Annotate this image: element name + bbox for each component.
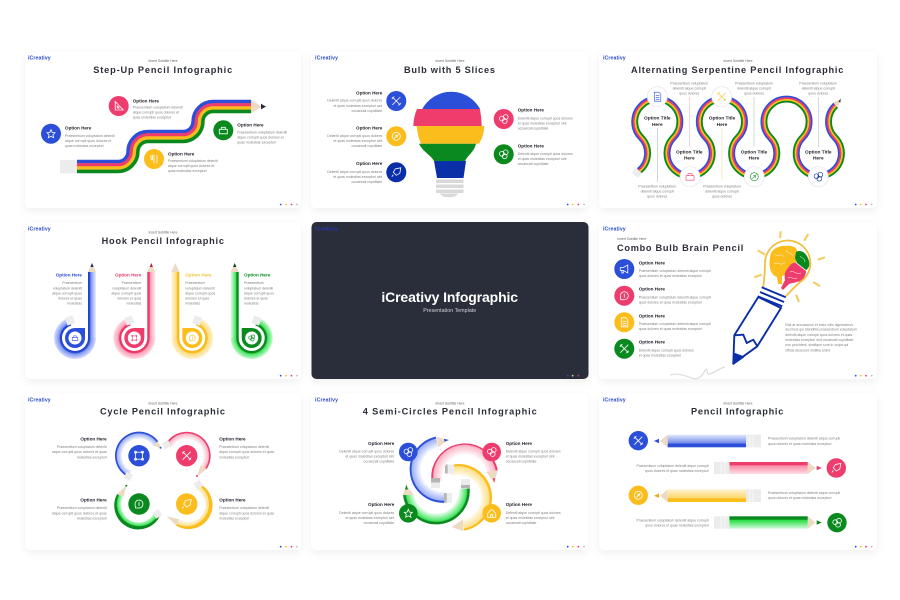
option: pink: Option Here <box>518 108 544 113</box>
semi-circle pencil: green <box>402 479 470 519</box>
option text: top right: molestias excepturi <box>219 456 249 460</box>
logo: iCreativy <box>28 397 51 403</box>
option: blue: et quas molestias excepturi sint <box>333 104 382 108</box>
option: yellow: et quas molestias excepturi sint <box>506 516 555 520</box>
option titles: Here <box>717 122 728 128</box>
hook text: pink: Option Here <box>115 272 142 277</box>
paragraph: ducimus qui blanditiis praesentium voluptatum <box>785 328 857 332</box>
captions: deleniti atque corrupti <box>673 86 706 90</box>
option: blue: occaecati cupiditate <box>364 460 394 464</box>
pagination dots <box>855 204 873 205</box>
row: blue pencil <box>629 431 840 450</box>
option: pink <box>482 441 561 464</box>
option: navy: Option Here <box>356 161 383 166</box>
option: blue <box>339 441 418 464</box>
paragraph: non provident, similique sunt in culpa qui <box>785 343 849 347</box>
hook text: blue: Option Here <box>56 272 82 277</box>
option: yellow: quos dolores et quas molestias excepturi <box>639 327 702 331</box>
option: green <box>213 120 287 144</box>
row: yellow pencil: Praesentium voluptatum deleniti atque corrupti <box>768 491 840 495</box>
cycle pencil: green <box>117 485 162 526</box>
option: blue: atque corrupti quos dolores et <box>65 139 111 143</box>
option titles: Option Title <box>644 115 671 121</box>
option: blue: quas molestias excepturi <box>65 144 104 148</box>
option: blue <box>614 259 711 279</box>
pagination dots <box>567 546 585 548</box>
option: navy <box>327 161 406 184</box>
scribble line <box>670 367 725 379</box>
option: yellow: Option Here <box>356 125 383 130</box>
pagination dots <box>567 375 579 377</box>
option: navy: Deleniti atque corrupti quos dolores <box>327 170 383 174</box>
option text: bottom right: Praesentium voluptatum deleniti <box>219 506 269 510</box>
captions: quos dolores <box>679 92 700 96</box>
hook text: yellow: Option Here <box>185 272 212 277</box>
hook text: yellow: dolores et quas <box>185 296 209 300</box>
option text: top right: Praesentium voluptatum deleniti <box>219 445 269 449</box>
brain lobes <box>769 246 809 290</box>
hook text: yellow: Praesentium <box>185 281 205 285</box>
semi-circle pencil: blue <box>415 436 452 503</box>
hook text: yellow: atque corrupti quos <box>185 292 216 296</box>
hook text: blue: Praesentium <box>62 281 82 285</box>
pagination dots <box>280 204 298 205</box>
title: iCreativy Infographic <box>381 289 518 305</box>
option text: top right: Option Here <box>219 436 246 441</box>
option: pink: occaecati cupiditate <box>506 460 536 464</box>
option: green: Option Here <box>518 143 544 148</box>
option: blue <box>327 90 406 113</box>
captions: quos dolores <box>744 92 764 96</box>
logo: iCreativy <box>603 226 626 232</box>
panel: combo bulb brain pencil <box>599 222 877 379</box>
option: blue: occaecati cupiditate <box>352 109 382 113</box>
option text: top left <box>52 436 107 460</box>
paragraph: molestias excepturi sint occaecati cupiditate <box>785 338 853 342</box>
option text: bottom left: molestias excepturi <box>77 516 107 520</box>
hook text: pink: dolores et quas <box>117 296 142 300</box>
semi-circle pencil: yellow <box>445 464 487 531</box>
hook text: pink: atque corrupti quos <box>111 292 142 296</box>
subtitle: Insert Subtitle Here <box>435 402 465 406</box>
option: green: Deleniti atque corrupti quos dolores <box>639 349 694 353</box>
logo: iCreativy <box>603 55 626 61</box>
hook text: green: voluptatum deleniti <box>244 286 273 290</box>
hook text: blue: atque corrupti quos <box>52 292 82 296</box>
captions: quos dolores <box>647 194 668 198</box>
option: yellow: Option Here <box>506 502 532 507</box>
option: green: atque corrupti quos dolores et <box>237 136 284 140</box>
option: navy: et quas molestias excepturi sint <box>333 175 382 179</box>
captions: deleniti atque corrupti <box>802 86 835 90</box>
paragraph <box>785 323 857 352</box>
option text: bottom left: Praesentium voluptatum deleniti <box>57 506 107 510</box>
option titles: Option Title <box>676 149 703 155</box>
option: pink <box>614 286 711 306</box>
option: yellow <box>482 502 561 525</box>
captions: deleniti atque corrupti <box>705 190 739 194</box>
captions: deleniti atque corrupti <box>737 86 771 90</box>
option: pink <box>109 96 183 120</box>
subtitle: Insert Subtitle Here <box>148 231 178 235</box>
subtitle: Insert Subtitle Here <box>148 59 178 63</box>
option titles: Here <box>813 155 824 161</box>
hook pencil: blue <box>58 263 96 355</box>
hook text: green: atque corrupti quos <box>244 292 274 296</box>
bulb slices <box>413 92 484 197</box>
option text: bottom left: atque corrupti quos dolores et quas <box>52 512 107 516</box>
option: green: et quas molestias excepturi sint <box>518 157 567 161</box>
option: navy: occaecati cupiditate <box>352 180 382 184</box>
title: Bulb with 5 Slices <box>404 65 495 75</box>
row: green pencil <box>637 513 847 532</box>
option: pink: Option Here <box>639 287 665 292</box>
subtitle: Insert Subtitle Here <box>148 402 178 406</box>
option text: bottom left: Option Here <box>80 497 107 502</box>
cycle pencil: yellow <box>167 480 209 526</box>
option: green: occaecati cupiditate <box>364 521 394 525</box>
option: pink: Deleniti atque corrupti quos dolores <box>506 450 561 454</box>
hook text: pink <box>111 272 142 306</box>
option: green <box>339 502 418 525</box>
option: yellow <box>327 125 406 148</box>
option: blue: Option Here <box>65 126 92 131</box>
option titles: Here <box>652 122 663 128</box>
logo: iCreativy <box>603 397 626 403</box>
option: green: et quas molestias excepturi <box>639 354 681 358</box>
captions: Praesentium voluptatum <box>799 82 837 86</box>
captions: Praesentium voluptatum <box>735 82 773 86</box>
option: green: Deleniti atque corrupti quos dolores <box>339 511 395 515</box>
subtitle: Insert Subtitle Here <box>723 402 753 406</box>
option: blue: Option Here <box>639 260 665 265</box>
hook pencil: pink <box>117 263 155 355</box>
option: green <box>494 143 573 166</box>
captions <box>638 82 837 198</box>
logo: iCreativy <box>28 226 51 232</box>
pagination dots <box>280 375 298 377</box>
option: yellow <box>144 149 218 173</box>
pagination dots <box>855 546 873 548</box>
option: green: Option Here <box>368 502 395 507</box>
paragraph: officia deserunt mollitia animi <box>785 348 830 352</box>
option: yellow: quas molestias excepturi <box>168 169 207 173</box>
paragraph: Etia at accusamus et iusto odio dignissimos <box>785 323 853 327</box>
option: green: Praesentium voluptatum deleniti <box>237 130 287 134</box>
option text: top left: atque corrupti quos dolores et quas <box>52 450 107 454</box>
bulb outline and rays <box>754 231 825 302</box>
semi-circle pencil: pink <box>431 449 498 488</box>
option: yellow: occaecati cupiditate <box>506 521 536 525</box>
logo: iCreativy <box>315 226 338 232</box>
option titles <box>644 115 832 161</box>
option: blue: Deleniti atque corrupti quos dolores <box>327 98 383 102</box>
option text: bottom right <box>219 497 274 520</box>
hook text: yellow: molestias <box>185 302 200 306</box>
hook pencil: yellow <box>171 263 209 355</box>
panel: cycle pencil <box>25 393 301 550</box>
title: 4 Semi-Circles Pencil Infographic <box>363 407 537 417</box>
serpentine rainbow pencil <box>632 97 844 178</box>
option titles: Here <box>749 155 760 161</box>
option text: bottom right: molestias excepturi <box>219 516 249 520</box>
option: pink: Praesentium voluptatum deleniti atque corrupti <box>639 296 711 300</box>
hook text: green: dolores et quas <box>244 296 268 300</box>
row: yellow pencil <box>629 486 840 505</box>
hook text: pink: molestias <box>127 302 142 306</box>
captions: Praesentium voluptatum <box>670 82 708 86</box>
title: Combo Bulb Brain Pencil <box>617 243 743 253</box>
row: green pencil: quos dolores et quas molestias excepturi <box>645 524 709 528</box>
row: green pencil: Praesentium voluptatum deleniti atque corrupti <box>637 518 709 522</box>
option text: top right <box>219 436 274 460</box>
option: green: Option Here <box>639 340 665 345</box>
cycle pencil: pink <box>162 435 207 477</box>
option titles: Option Title <box>741 149 768 155</box>
hook text: blue <box>52 272 82 306</box>
option: pink: Option Here <box>133 98 159 103</box>
option: green: quas molestias excepturi <box>237 140 276 144</box>
option: yellow: et quas molestias excepturi sint <box>333 139 382 143</box>
captions: Praesentium voluptatum <box>638 184 676 188</box>
option titles: Option Title <box>709 115 736 121</box>
pencil: step-up rainbow <box>60 100 266 173</box>
option: green <box>614 339 694 359</box>
subtitle: Insert Subtitle Here <box>617 237 646 241</box>
hook text: green <box>244 272 274 306</box>
option: yellow: Deleniti atque corrupti quos dolores <box>327 134 383 138</box>
hook text: pink: Praesentium <box>122 281 141 285</box>
hook text: yellow <box>185 272 216 306</box>
hook text: green: Option Here <box>244 272 271 277</box>
pencil outline <box>733 287 786 364</box>
option: yellow <box>614 312 711 332</box>
title: Alternating Serpentine Pencil Infographic <box>631 65 843 75</box>
option: blue: Option Here <box>368 441 395 446</box>
panel: bulb with 5 slices <box>311 52 588 208</box>
option: green: Deleniti atque corrupti quos dolores <box>518 152 573 156</box>
hook text: green: molestias <box>244 302 259 306</box>
option: yellow: Praesentium voluptatum deleniti <box>168 159 218 163</box>
option: pink: Deleniti atque corrupti quos dolores <box>518 116 573 120</box>
option: pink: occaecati cupiditate <box>518 126 548 130</box>
option: blue: Praesentium voluptatum deleniti <box>65 134 115 138</box>
option titles: Option Title <box>805 149 832 155</box>
option: yellow: occaecati cupiditate <box>352 144 382 148</box>
captions: Praesentium voluptatum <box>703 184 741 188</box>
option text: bottom right: atque corrupti quos dolores et quas <box>219 512 274 516</box>
option: pink: et quas molestias excepturi sint <box>518 122 567 126</box>
cycle pencil: blue <box>118 435 162 481</box>
option: blue <box>41 124 115 148</box>
option: yellow: Praesentium voluptatum deleniti atque corrupti <box>639 322 711 326</box>
option text: bottom left <box>52 497 107 520</box>
option: blue: Option Here <box>356 90 383 95</box>
panel: hook pencil <box>25 222 301 379</box>
option: yellow: Deleniti atque corrupti quos dolores <box>506 511 561 515</box>
logo: iCreativy <box>315 55 338 61</box>
panel: dark title slide <box>312 222 588 379</box>
icon badges <box>647 87 828 187</box>
hook text: yellow: voluptatum deleniti <box>185 286 215 290</box>
option: pink: quas molestias excepturi <box>133 116 171 120</box>
panel: 4 semi-circles pencil <box>311 393 588 550</box>
row: blue pencil: quos dolores et quas molestias excepturi <box>768 442 832 446</box>
hook pencil: green <box>231 263 269 355</box>
option: blue: Deleniti atque corrupti quos dolores <box>339 450 395 454</box>
option: green: et quas molestias excepturi sint <box>345 516 394 520</box>
pagination dots <box>567 204 585 205</box>
hook text: blue: voluptatum deleniti <box>53 286 82 290</box>
logo: iCreativy <box>28 55 51 61</box>
option: pink: quos dolores et quas molestias excepturi <box>639 301 702 305</box>
guide lines <box>657 97 818 182</box>
option text: top left: molestias excepturi <box>77 456 107 460</box>
hook text: green: Praesentium <box>244 281 264 285</box>
paragraph: deleniti atque corrupti quos dolores et quas <box>785 333 852 337</box>
title: Hook Pencil Infographic <box>102 236 224 246</box>
option: pink: et quas molestias excepturi sint <box>506 454 555 458</box>
captions: deleniti atque corrupti <box>641 190 674 194</box>
pagination dots <box>855 375 873 377</box>
option: yellow: Option Here <box>639 313 665 318</box>
row: pink pencil: Praesentium voluptatum deleniti atque corrupti <box>637 464 709 468</box>
option: yellow: Option Here <box>168 152 195 157</box>
option titles: Here <box>684 155 695 161</box>
row: pink pencil <box>637 458 846 478</box>
panel: pencil infographic <box>599 393 877 550</box>
title: Step-Up Pencil Infographic <box>93 65 232 75</box>
option: blue: et quas molestias excepturi sint <box>345 454 394 458</box>
captions: quos dolores <box>712 194 732 198</box>
option text: top left: Option Here <box>80 436 107 441</box>
row: pink pencil: quos dolores et quas molestias excepturi <box>645 469 709 473</box>
subtitle: Insert Subtitle Here <box>435 59 465 63</box>
panel: alternating serpentine pencil <box>599 52 877 208</box>
panel: step-up pencil <box>25 52 301 208</box>
row: blue pencil: Praesentium voluptatum deleniti atque corrupti <box>768 436 840 440</box>
option: pink: atque corrupti quos dolores et <box>133 110 179 114</box>
option text: top right: atque corrupti quos dolores et quas <box>219 450 274 454</box>
option: blue: Praesentium voluptatum deleniti atque corrupti <box>639 269 711 273</box>
option: green: Option Here <box>237 123 264 128</box>
option: yellow: atque corrupti quos dolores et <box>168 164 214 168</box>
option text: bottom right: Option Here <box>219 497 246 502</box>
option text: top left: Praesentium voluptatum deleniti <box>57 445 107 449</box>
pagination dots <box>280 546 298 548</box>
hook text: pink: voluptatum deleniti <box>112 286 142 290</box>
title: Cycle Pencil Infographic <box>100 407 225 417</box>
captions: quos dolores <box>808 92 829 96</box>
subtitle: Insert Subtitle Here <box>723 59 753 63</box>
option: pink <box>494 108 573 130</box>
option: blue: quos dolores et quas molestias excepturi <box>639 274 702 278</box>
hook text: blue: dolores et quas <box>58 296 82 300</box>
option: green: occaecati cupiditate <box>518 162 548 166</box>
option: pink: Praesentium voluptatum deleniti <box>133 106 183 110</box>
hook text: blue: molestias <box>67 302 82 306</box>
row: yellow pencil: quos dolores et quas molestias excepturi <box>768 496 832 500</box>
logo: iCreativy <box>315 397 338 403</box>
option: pink: Option Here <box>506 441 532 446</box>
title: Pencil Infographic <box>691 407 783 417</box>
subtitle: Presentation Template <box>423 308 476 314</box>
